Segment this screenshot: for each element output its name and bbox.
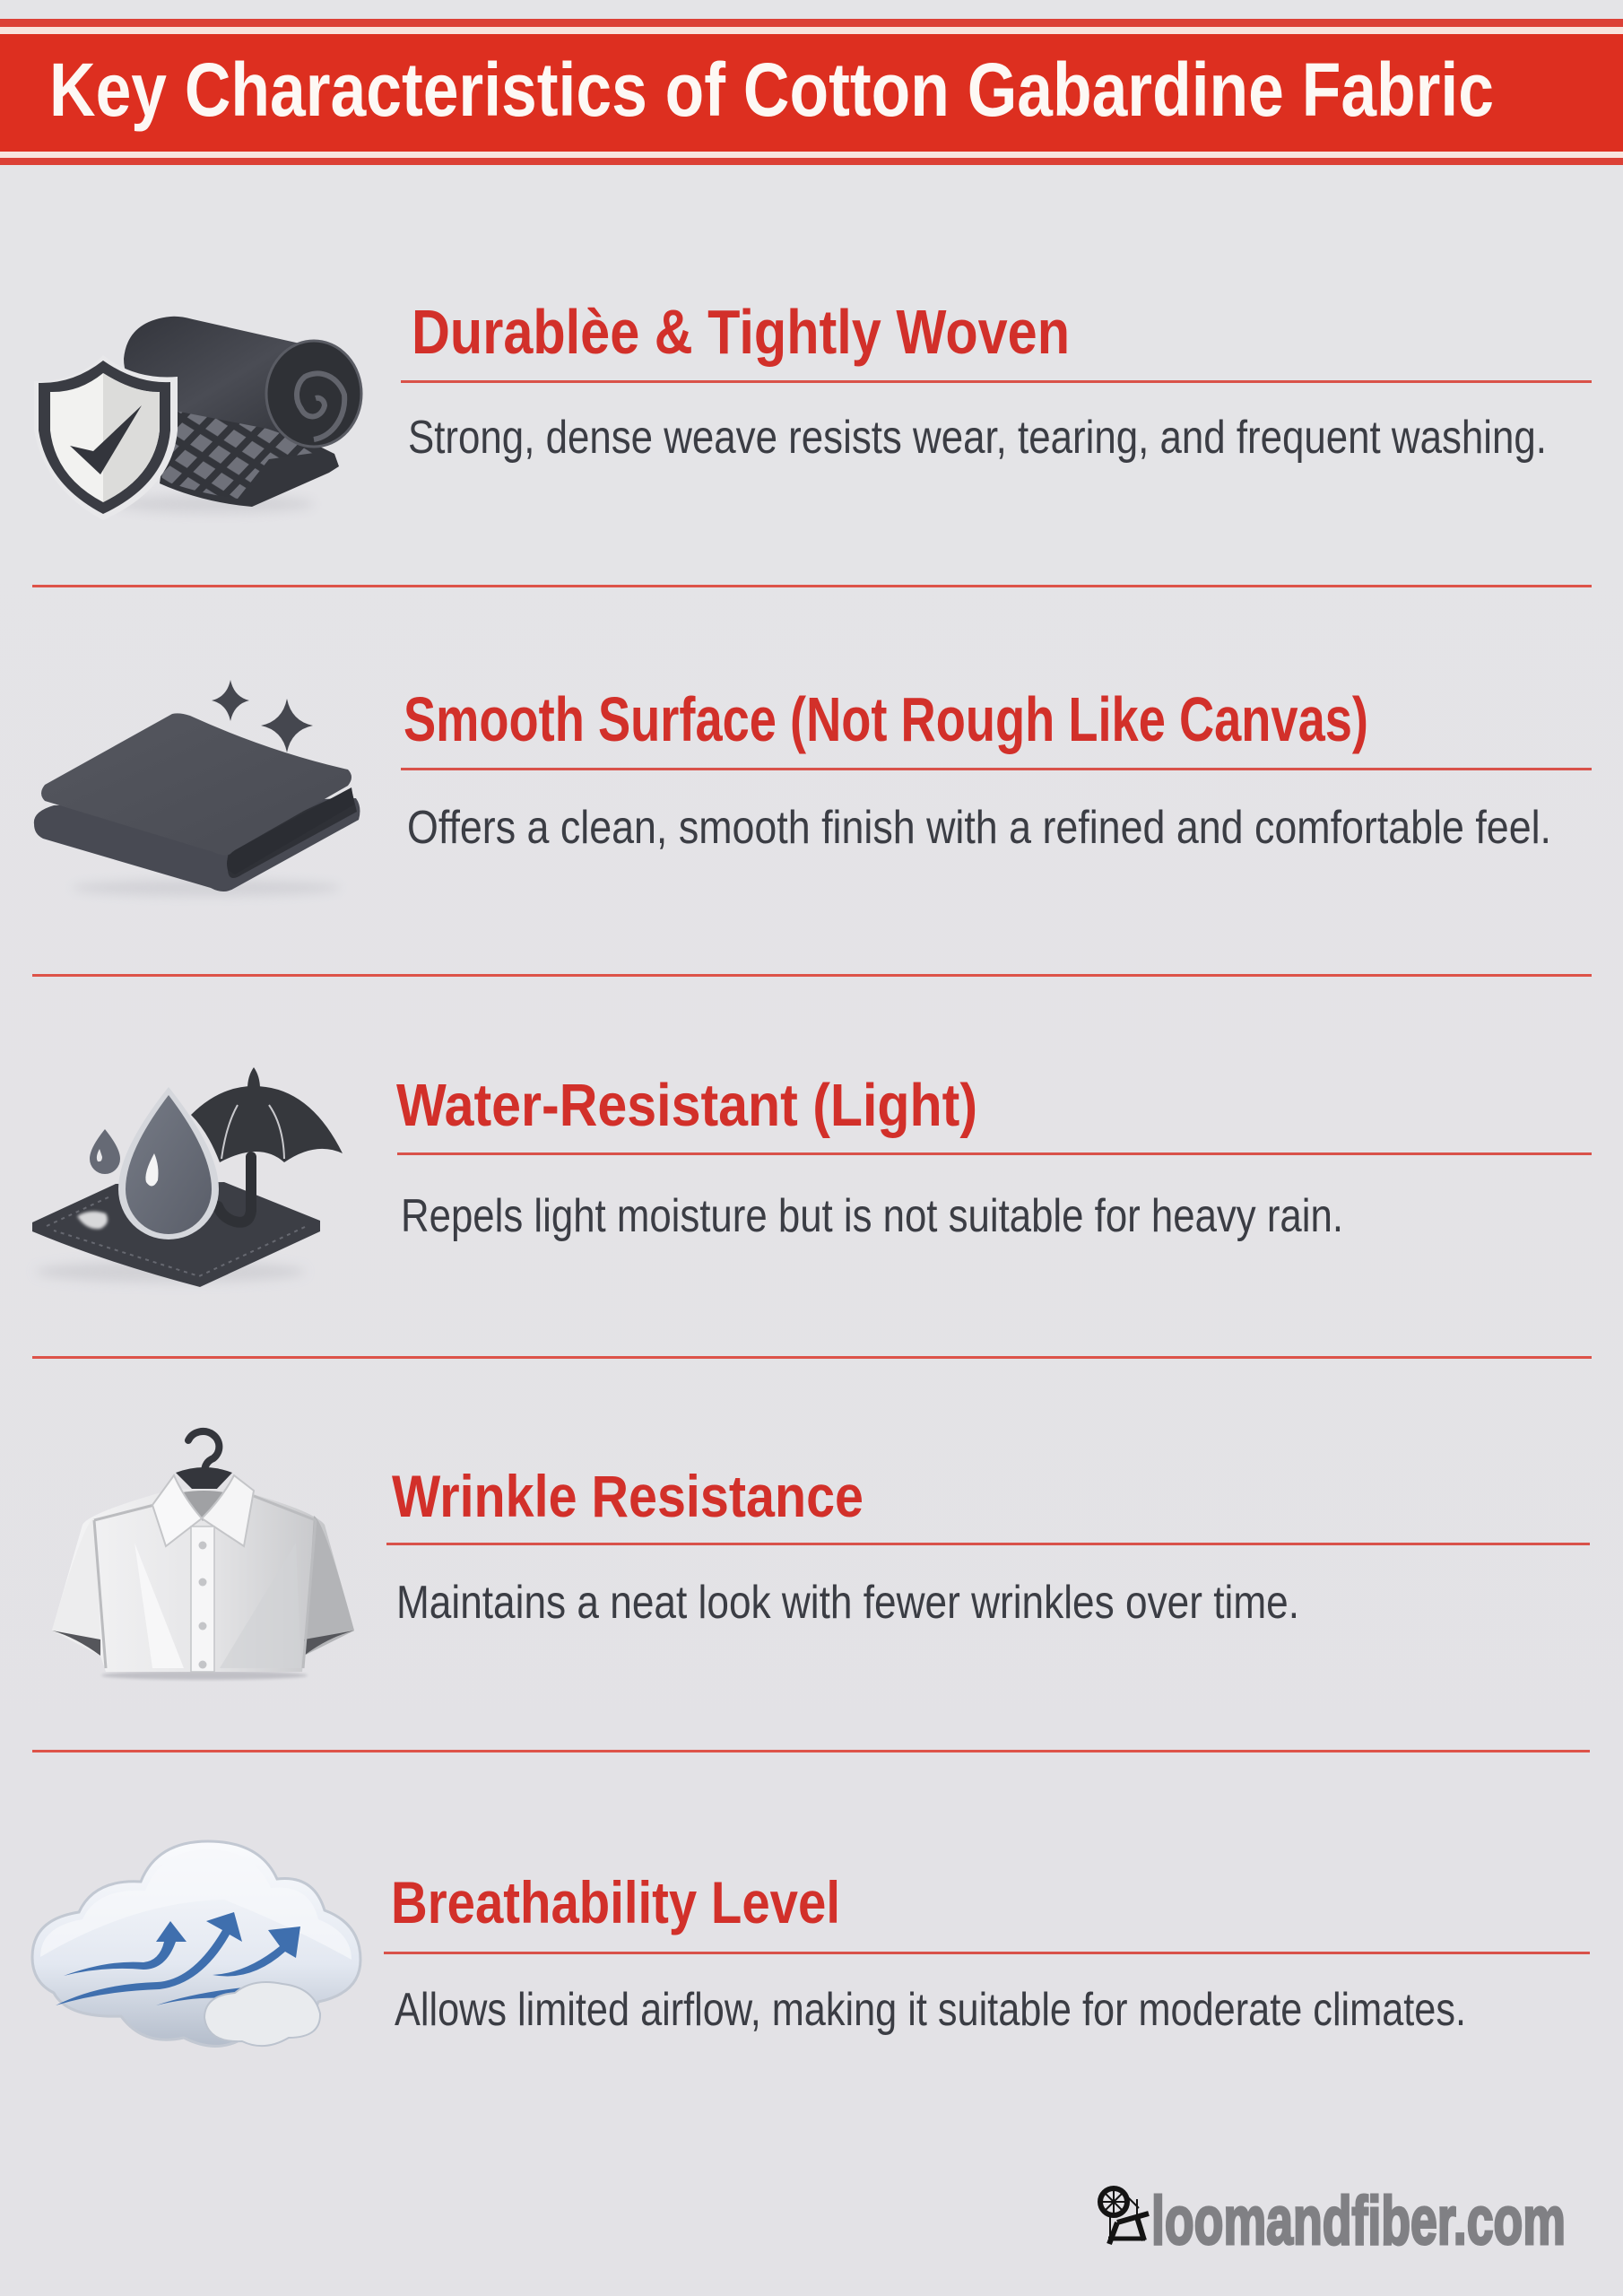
heading: Breathability Level: [391, 1869, 840, 1935]
heading: Water-Resistant (Light): [396, 1072, 977, 1139]
icon: umbrella, water drops and fabric: [32, 1067, 343, 1287]
heading rule: [397, 1152, 1592, 1155]
icon: small foreground cloud: [204, 1982, 320, 2046]
heading rule: [384, 1952, 1590, 1954]
icon: large water drop: [118, 1087, 219, 1239]
icon: fabric roll and shield: [34, 317, 361, 520]
icon: shirt on hanger: [52, 1431, 354, 1680]
icon: cloud with airflow arrows: [32, 1841, 360, 2046]
description: Repels light moisture but is not suitable for heavy rain.: [401, 1190, 1343, 1242]
icon: small water drop: [90, 1129, 120, 1174]
section: durable and tightly woven: [34, 297, 1592, 520]
section: smooth surface: [34, 680, 1592, 896]
icon: spinning wheel: [1100, 2188, 1149, 2244]
heading: Smooth Surface (Not Rough Like Canvas): [404, 684, 1368, 754]
description: Maintains a neat look with fewer wrinkles over time.: [396, 1577, 1299, 1629]
section: water-resistant: [32, 1067, 1592, 1287]
icon: large sparkle: [261, 699, 313, 752]
icon: small sparkle: [212, 680, 249, 721]
heading: Wrinkle Resistance: [392, 1463, 864, 1529]
section: wrinkle resistance: [52, 1431, 1590, 1680]
section: breathability level: [32, 1841, 1590, 2046]
heading rule: [401, 768, 1592, 770]
heading rule: [386, 1543, 1590, 1545]
logo: loomandfiber.com: [1100, 2183, 1566, 2259]
header banner: [0, 19, 1623, 165]
icon: folded fabric with sparkles: [34, 680, 360, 896]
heading rule: [401, 380, 1592, 383]
heading: Durablèe & Tightly Woven: [412, 297, 1070, 367]
